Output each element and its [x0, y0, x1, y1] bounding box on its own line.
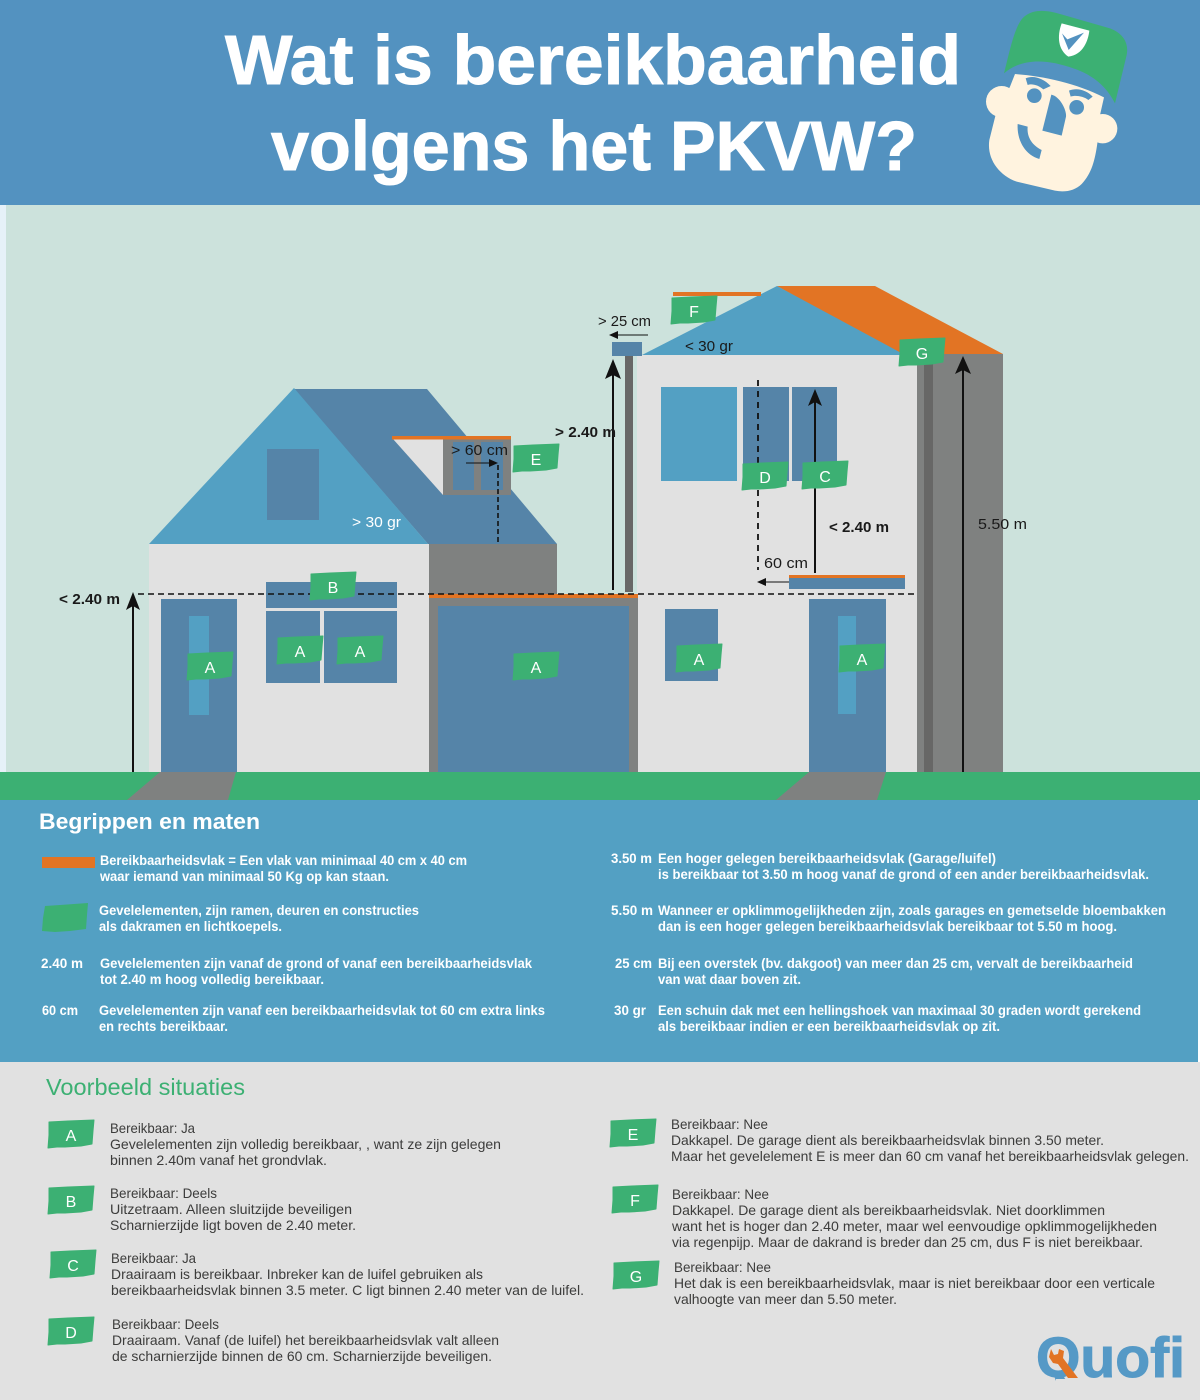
ground with paths	[0, 772, 1200, 800]
title	[225, 21, 961, 185]
definition: 5.50 m: Wanneer er opklimmogelijkheden zijn, zoals garages en gemetselde bloembakken	[658, 903, 1166, 918]
definition: 30 gr: 30 gr	[614, 1003, 647, 1018]
measurement labels: > 2.40 m	[555, 424, 616, 441]
tag A door left	[187, 652, 233, 680]
measurement labels: < 2.40 m	[59, 591, 120, 608]
example F: Dakkapel. De garage dient als bereikbaarheidsvlak. Niet doorklimmen	[672, 1203, 1105, 1218]
example A	[48, 1120, 501, 1168]
measurement labels: < 2.40 m	[829, 519, 889, 536]
definition: 60 cm: 60 cm	[42, 1003, 78, 1018]
tag A door left: A	[205, 660, 216, 677]
example G: G	[630, 1269, 642, 1286]
legend: orange surface	[42, 857, 95, 868]
tag A door right	[839, 644, 885, 672]
panel: begrippen en maten	[0, 800, 1200, 1062]
example D: Bereikbaar: Deels	[112, 1317, 219, 1332]
example B: Bereikbaar: Deels	[110, 1186, 217, 1201]
example F: Bereikbaar: Nee	[672, 1187, 769, 1202]
example F: via regenpijp. Maar de dakrand is breder dan 25 cm, dus F is niet bereikbaar.	[672, 1235, 1143, 1250]
example G: Bereikbaar: Nee	[674, 1260, 771, 1275]
tag B	[310, 572, 356, 600]
example A: Bereikbaar: Ja	[110, 1121, 195, 1136]
header band	[0, 0, 1200, 205]
example E	[610, 1117, 1189, 1164]
tag A garage	[513, 652, 559, 680]
definition: 2.40 m	[41, 956, 533, 987]
example C: C	[67, 1258, 79, 1275]
definition: 25 cm: Bij een overstek (bv. dakgoot) van meer dan 25 cm, vervalt de bereikbaarheid	[658, 956, 1133, 971]
definition: 5.50 m: 5.50 m	[611, 903, 653, 918]
example C	[50, 1250, 584, 1298]
definition: 30 gr: als bereikbaar indien er een bereikbaarheidsvlak op zit.	[658, 1019, 1000, 1034]
definition: 60 cm: Gevelelementen zijn vanaf een bereikbaarheidsvlak tot 60 cm extra links	[99, 1003, 545, 1018]
measurement labels: 60 cm	[764, 555, 808, 572]
example E: E	[628, 1127, 638, 1144]
title: volgens het PKVW?	[271, 107, 917, 185]
legend: orange surface text: Bereikbaarheidsvlak = Een vlak van minimaal 40 cm x 40 cm	[100, 853, 467, 868]
heading: begrippen en maten: Begrippen en maten	[39, 809, 260, 834]
definition: 30 gr: Een schuin dak met een hellingshoek van maximaal 30 graden wordt gerekend	[658, 1003, 1141, 1018]
measurement labels: 5.50 m	[978, 516, 1027, 533]
example D: de scharnierzijde binnen de 60 cm. Scharnierzijde beveiligen.	[112, 1349, 492, 1364]
tag F	[671, 296, 717, 324]
example F	[612, 1185, 1157, 1250]
tag B: B	[328, 580, 338, 597]
definition: 60 cm	[42, 1003, 545, 1034]
measurement labels	[59, 313, 1027, 608]
tag E: E	[531, 452, 541, 469]
definition: 60 cm: en rechts bereikbaar.	[99, 1019, 228, 1034]
measurement labels: < 30 gr	[685, 338, 733, 355]
definition: 25 cm: 25 cm	[615, 956, 652, 971]
definition: 30 gr	[614, 1003, 1141, 1034]
example A: binnen 2.40m vanaf het grondvlak.	[110, 1153, 327, 1168]
example F: want het is hoger dan 2.40 meter, maar wel eenvoudige opklimmogelijkheden	[671, 1219, 1157, 1234]
example B: Uitzetraam. Alleen sluitzijde beveiligen	[110, 1202, 352, 1217]
example C: bereikbaarheidsvlak binnen 3.5 meter. C ligt binnen 2.40 meter van de luifel.	[111, 1283, 584, 1298]
example D: D	[65, 1325, 77, 1342]
definition: 3.50 m: 3.50 m	[611, 851, 652, 866]
example D: Draairaam. Vanaf (de luifel) het bereikbaarheidsvlak valt alleen	[112, 1333, 499, 1348]
definition: 5.50 m: dan is een hoger gelegen bereikbaarheidsvlak bereikbaar tot 5.50 m hoog.	[658, 919, 1117, 934]
example G	[613, 1260, 1155, 1307]
example D	[48, 1317, 499, 1364]
measurement labels: > 30 gr	[352, 514, 401, 531]
example E: Dakkapel. De garage dient als bereikbaarheidsvlak binnen 3.50 meter.	[671, 1133, 1104, 1148]
dashed measurement lines	[138, 380, 917, 594]
tag D: D	[759, 470, 771, 487]
heading: voorbeeld situaties: Voorbeeld situaties	[46, 1074, 245, 1100]
logo: Quofi: Quofi	[1036, 1326, 1185, 1390]
tag C	[802, 461, 848, 489]
arrows	[126, 331, 971, 772]
definition: 3.50 m: Een hoger gelegen bereikbaarheidsvlak (Garage/luifel)	[658, 851, 996, 866]
definition: 2.40 m: Gevelelementen zijn vanaf de grond of vanaf een bereikbaarheidsvlak	[100, 956, 533, 971]
tag D	[742, 462, 788, 490]
tag A door right: A	[857, 652, 868, 669]
tag F: F	[689, 304, 699, 321]
legend: green tag text	[99, 903, 419, 934]
legend: green tag text: Gevelelementen, zijn ramen, deuren en constructies	[99, 903, 419, 918]
tag A window 1: A	[295, 644, 306, 661]
definition: 2.40 m: tot 2.40 m hoog volledig bereikbaar.	[100, 972, 324, 987]
example B: Scharnierzijde ligt boven de 2.40 meter.	[110, 1218, 356, 1233]
definition: 5.50 m	[611, 903, 1166, 934]
title: Wat is bereikbaarheid	[225, 21, 961, 99]
tag A window 2	[337, 636, 383, 664]
example B: B	[66, 1194, 76, 1211]
icon: mascot face with green cap	[986, 11, 1127, 191]
tag A window 2: A	[355, 644, 366, 661]
garage	[429, 594, 638, 772]
tag A window 1	[277, 636, 323, 664]
example E: Bereikbaar: Nee	[671, 1117, 768, 1132]
legend: green tag text: als dakramen en lichtkoepels.	[99, 919, 282, 934]
example A: A	[66, 1128, 77, 1145]
measurement labels: > 25 cm	[598, 313, 651, 330]
example A: Gevelelementen zijn volledig bereikbaar, , want ze zijn gelegen	[110, 1137, 501, 1152]
tag A garage: A	[531, 660, 542, 677]
definition: 2.40 m: 2.40 m	[41, 956, 83, 971]
definition: 3.50 m	[611, 851, 1149, 882]
legend: green tag	[42, 903, 88, 932]
right house	[612, 286, 1003, 772]
tag C: C	[819, 469, 831, 486]
tag G: G	[916, 346, 928, 363]
example B	[48, 1186, 356, 1233]
example C: Bereikbaar: Ja	[111, 1251, 196, 1266]
example F: F	[630, 1193, 640, 1210]
definition: 25 cm: van wat daar boven zit.	[658, 972, 801, 987]
tag E	[513, 444, 559, 472]
legend: orange surface text: waar iemand van minimaal 50 Kg op kan staan.	[99, 869, 389, 884]
example G: Het dak is een bereikbaarheidsvlak, maar is niet bereikbaar door een verticale	[674, 1276, 1155, 1291]
example G: valhoogte van meer dan 5.50 meter.	[674, 1292, 897, 1307]
definition: 25 cm	[615, 956, 1133, 987]
measurement labels: > 60 cm	[451, 442, 508, 459]
tag A window right	[676, 644, 722, 672]
tag G	[899, 338, 945, 366]
definition: 3.50 m: is bereikbaar tot 3.50 m hoog vanaf de grond of een ander bereikbaarheidsvlak.	[658, 867, 1149, 882]
panel: voorbeeld situaties	[0, 1062, 1200, 1400]
left house	[149, 388, 557, 772]
panel: house illustration background	[0, 205, 1200, 772]
example C: Draairaam is bereikbaar. Inbreker kan de luifel gebruiken als	[111, 1267, 483, 1282]
legend: orange surface text	[99, 853, 467, 884]
example E: Maar het gevelelement E is meer dan 60 cm vanaf het bereikbaarheidsvlak gelegen.	[671, 1149, 1189, 1164]
tag A window right: A	[694, 652, 705, 669]
